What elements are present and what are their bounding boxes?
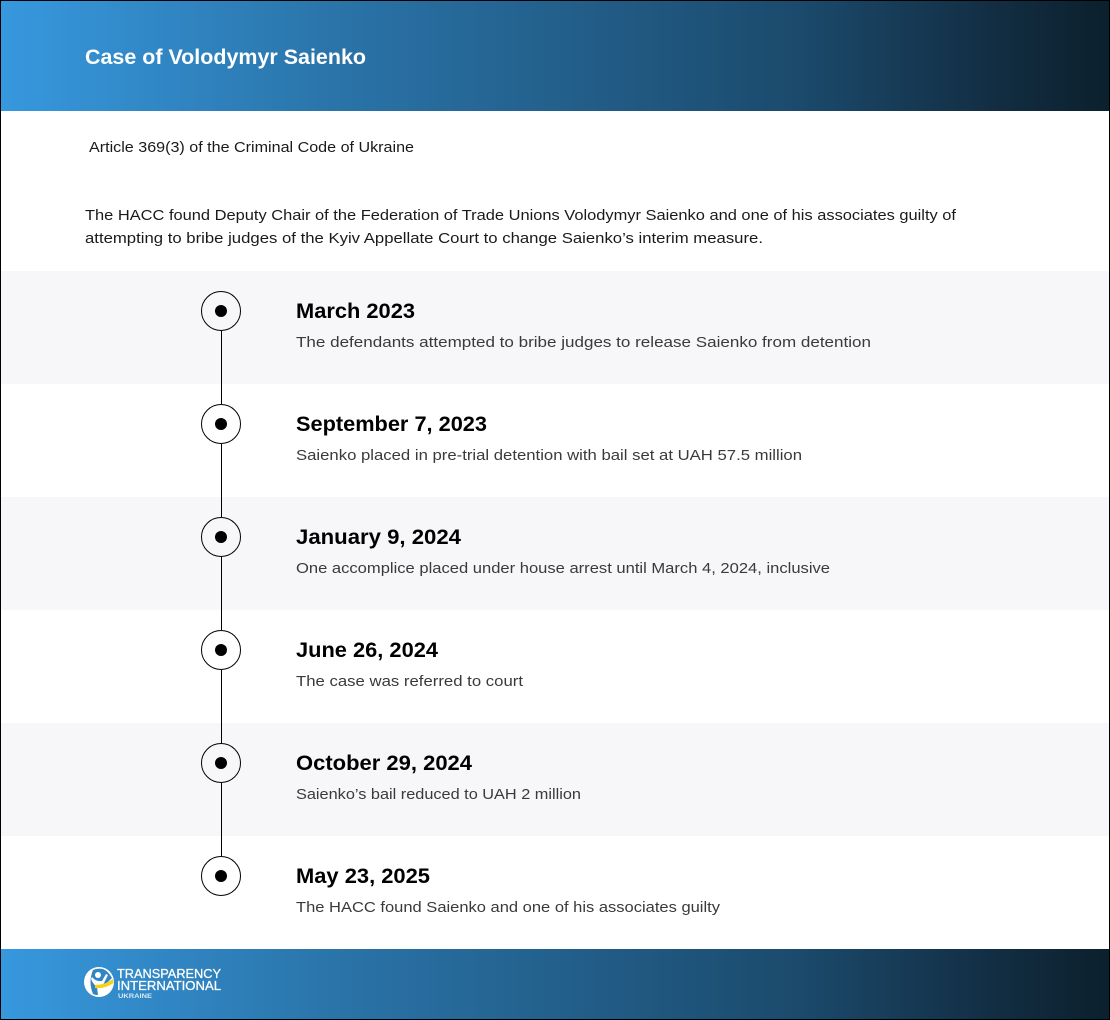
timeline entry: June 26, 2024 (202, 630, 524, 690)
logo wordmark: INTERNATIONAL (117, 979, 221, 993)
logo: Transparency International Ukraine (84, 967, 222, 1000)
timeline entry: October 29, 2024 (202, 744, 581, 803)
timeline entry: September 7, 2023 (202, 404, 802, 464)
timeline connector (220, 331, 222, 856)
marker (202, 744, 240, 782)
summary paragraph: The HACC found Deputy Chair of the Federation of Trade Unions Volodymyr Saienko and one of his associates guilty of (85, 207, 957, 224)
date: March 2023 (296, 300, 415, 323)
timeline entry: March 2023 (202, 292, 871, 351)
icon: globe with figure (84, 967, 114, 997)
title: Case of Volodymyr Saienko (85, 46, 366, 69)
summary paragraph: attempting to bribe judges of the Kyiv Appellate Court to change Saienko’s interim measure. (85, 230, 763, 247)
footer band (1, 949, 1109, 1019)
logo wordmark: UKRAINE (118, 993, 153, 1000)
description: The HACC found Saienko and one of his associates guilty (296, 899, 721, 916)
description: Saienko placed in pre-trial detention with bail set at UAH 57.5 million (296, 447, 802, 464)
row background: January 9, 2024 (1, 497, 1109, 610)
description: Saienko’s bail reduced to UAH 2 million (296, 786, 581, 803)
article reference: Article 369(3) of the Criminal Code of Ukraine (89, 139, 414, 156)
row background: October 29, 2024 (1, 723, 1109, 836)
marker (202, 856, 240, 896)
date: January 9, 2024 (296, 526, 461, 549)
timeline entry: May 23, 2025 (202, 856, 721, 916)
date: May 23, 2025 (296, 865, 430, 888)
description: The case was referred to court (296, 673, 524, 690)
summary paragraph (85, 207, 957, 247)
description: One accomplice placed under house arrest until March 4, 2024, inclusive (296, 560, 830, 577)
date: September 7, 2023 (296, 413, 487, 436)
date: June 26, 2024 (296, 639, 438, 662)
marker (202, 404, 240, 444)
marker (202, 292, 240, 330)
marker (202, 518, 240, 556)
description: The defendants attempted to bribe judges to release Saienko from detention (296, 334, 871, 351)
header band (1, 1, 1109, 111)
date: October 29, 2024 (296, 752, 472, 775)
row background: March 2023 (1, 271, 1109, 384)
logo wordmark: TRANSPARENCY (117, 967, 222, 981)
timeline entry: January 9, 2024 (202, 518, 830, 577)
marker (202, 630, 240, 670)
logo wordmark (117, 967, 222, 1000)
